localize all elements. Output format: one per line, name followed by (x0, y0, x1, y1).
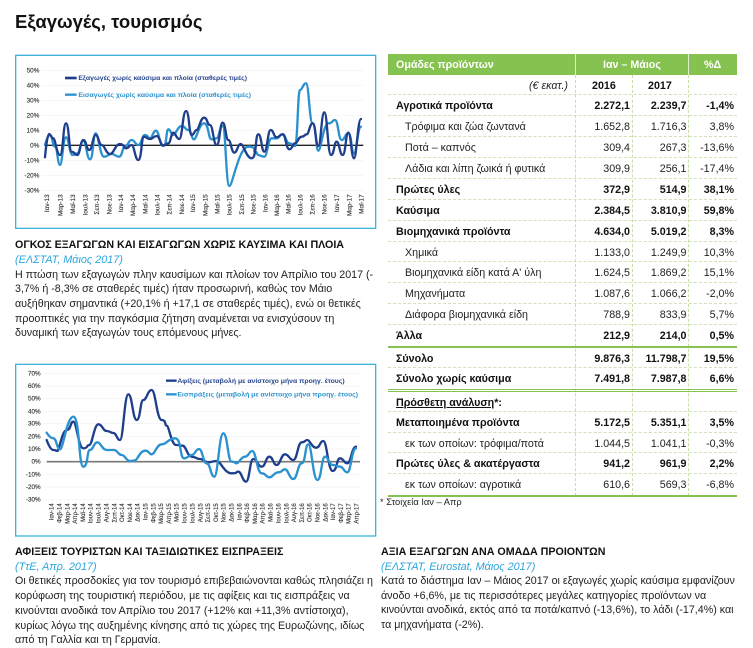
y axis labels: 30% (27, 97, 40, 104)
x axis labels: Μαρ-14 (65, 503, 71, 524)
row: 309,4 (603, 142, 630, 154)
row: 961,9 (660, 458, 686, 470)
row: total excluding fuels: 6,6% (710, 373, 734, 385)
row: 788,9 (603, 309, 630, 321)
x axis labels: Απρ-16 (261, 503, 267, 524)
row: 1.087,6 (594, 288, 630, 300)
x axis labels: Ιουν-15 (183, 503, 189, 523)
row: 38,1% (704, 184, 734, 196)
x axis labels: Μαϊ-15 (175, 503, 181, 522)
legend (166, 377, 358, 399)
row (388, 304, 737, 325)
row: 833,9 (660, 309, 686, 321)
row: 2.239,7 (651, 100, 686, 112)
line: receipts (47, 417, 356, 480)
row: εκ των οποίων: τρόφιμα/ποτά (405, 438, 544, 450)
row: 2,2% (710, 458, 734, 470)
row: 4.634,0 (594, 226, 630, 238)
row: Διάφορα βιομηχανικά είδη (405, 309, 528, 321)
section: tourism text (15, 546, 373, 646)
title: Εξαγωγές, τουρισμός (15, 11, 202, 32)
row: -17,4% (700, 163, 734, 175)
x axis labels: Δεκ-14 (136, 503, 142, 522)
section: exports and imports text (15, 239, 373, 339)
section: export value text (381, 546, 735, 631)
row: total excluding fuels: Σύνολο χωρίς καύσιμα (396, 373, 511, 385)
row (388, 262, 737, 283)
row: -2,0% (706, 288, 734, 300)
row: Λάδια και λίπη ζωικά ή φυτικά (405, 163, 545, 175)
row: total: 19,5% (704, 353, 734, 365)
row: 941,2 (603, 458, 630, 470)
line: exports (45, 111, 361, 160)
heading: ΑΞΙΑ ΕΞΑΓΩΓΩΝ ΑΝΑ ΟΜΑΔΑ ΠΡΟΙΟΝΤΩΝ (381, 546, 605, 558)
x axis labels: Μαρ-17 (346, 194, 353, 216)
x axis labels: Μαρ-15 (159, 503, 165, 524)
y axis labels: 20% (27, 112, 40, 119)
body text: κινούνται ανοδικά τον Απρίλιο του 2017 (+12% και +11,3% αντίστοιχα), (15, 605, 349, 617)
table: exports by product group (388, 54, 737, 497)
x axis labels: Μαρ-15 (202, 194, 209, 216)
row: 1.249,9 (651, 247, 686, 259)
x axis labels: Φεβ-17 (339, 503, 345, 523)
x axis labels: Μαϊ-15 (214, 194, 221, 214)
row (388, 221, 737, 242)
x axis labels: Ιαν-17 (331, 503, 337, 520)
x axis labels: Φεβ-15 (151, 503, 157, 523)
row: -13,6% (700, 142, 734, 154)
x axis labels: Αυγ-15 (198, 503, 204, 522)
row: 5.172,5 (594, 417, 630, 429)
x axis labels: Μαρ-17 (347, 503, 353, 524)
row (405, 479, 734, 491)
row: 5,7% (710, 309, 734, 321)
row: 3,5% (710, 417, 734, 429)
row: 15,1% (704, 267, 734, 279)
line: arrivals (47, 390, 356, 482)
unit row: (€ εκατ.) (529, 80, 568, 92)
x axis labels: Σεπ-14 (112, 503, 118, 523)
row (388, 179, 737, 200)
y axis labels: -20% (25, 172, 40, 179)
row: 10,3% (704, 247, 734, 259)
y axis labels: 0% (32, 459, 41, 466)
row: Χημικά (405, 247, 438, 259)
row (388, 116, 737, 137)
y axis labels: 50% (28, 396, 41, 403)
row: 1.044,5 (594, 438, 630, 450)
y axis labels: 20% (28, 433, 41, 440)
x axis labels: Ιαν-15 (144, 503, 150, 520)
legend: Εξαγωγές χωρίς καύσιμα και πλοία (σταθερές τιμές) (78, 74, 247, 82)
row: 372,9 (603, 184, 630, 196)
body text: 3,7% ή -8,3% σε σταθερές τιμές) ήταν προσωρινή, καθώς τον Μάιο (15, 283, 332, 295)
x axis labels: Ιουν-14 (89, 503, 95, 523)
row: Πρώτες ύλες & ακατέργαστα (396, 458, 540, 470)
row: 1.869,2 (651, 267, 686, 279)
row: 1.041,1 (651, 438, 686, 450)
x axis labels: Αυγ-16 (292, 503, 298, 522)
x axis labels: Ιουλ-15 (226, 194, 233, 215)
legend (65, 74, 251, 99)
row: Βιομηχανικά είδη κατά Α' ύλη (405, 267, 541, 279)
line: imports (45, 83, 361, 186)
x axis labels: Ιουλ-14 (97, 503, 103, 523)
y axis labels: 10% (27, 127, 40, 134)
x axis labels: Νοε-15 (222, 503, 228, 522)
x axis labels: Ιαν-13 (44, 194, 51, 212)
body text (15, 269, 373, 339)
body text: Κατά το διάστημα Ιαν – Μάιος 2017 οι εξαγωγές χωρίς καύσιμα εμφανίζουν (381, 575, 735, 587)
x axis labels: Μαϊ-14 (81, 503, 87, 522)
x axis labels: Νοε-16 (322, 194, 329, 214)
body text (381, 575, 735, 631)
row: 0,5% (710, 330, 734, 342)
row: -0,3% (706, 438, 734, 450)
x axis labels: Ιαν-16 (237, 503, 243, 520)
x axis labels: Οκτ-15 (214, 503, 220, 522)
legend: Αφίξεις (μεταβολή με ανίστοιχο μήνα προηγ. έτους) (177, 377, 345, 385)
row: 1.066,2 (651, 288, 686, 300)
body text: κυρίως λόγω της αυξημένης κίνησης από τις χώρες της Ευρωζώνης, ιδίως (15, 620, 364, 632)
x axis labels: Ιουλ-15 (190, 503, 196, 523)
x axis labels: Μαϊ-13 (70, 194, 77, 214)
row (396, 330, 734, 342)
unit row: 2017 (648, 80, 672, 92)
row: 267,3 (660, 142, 686, 154)
body text: άνοδο +6,6%, με τις περισσότερες μεγάλες κατηγορίες προϊόντων να (381, 590, 706, 602)
row (388, 453, 737, 474)
legend: Εισπράξεις (μεταβολή με ανίστοιχο μήνα προηγ. έτους) (177, 391, 358, 399)
table header: %Δ (704, 59, 721, 71)
x axis labels: Δεκ-15 (230, 503, 236, 522)
y axis labels: 0% (30, 142, 40, 149)
x axis labels (44, 194, 365, 216)
row: 3.810,9 (651, 205, 686, 217)
row: 610,6 (603, 479, 630, 491)
row: Μηχανήματα (405, 288, 465, 300)
legend: Εισαγωγές χωρίς καύσιμα και πλοία (σταθερές τιμές) (78, 91, 251, 99)
x axis labels: Απρ-17 (355, 503, 361, 524)
body text: κινούνται ανοδικά, εκτός από τα ποτά/καπνό (-13,6%), το λάδι (-17,4%) και (381, 604, 734, 616)
row: 214,0 (660, 330, 686, 342)
body text: Η πτώση των εξαγωγών πλην καυσίμων και πλοίων τον Απρίλιο του 2017 (- (15, 269, 373, 281)
y axis labels (25, 67, 40, 194)
row: εκ των οποίων: αγροτικά (405, 479, 521, 491)
x axis labels: Οκτ-14 (120, 503, 126, 522)
row: 309,9 (603, 163, 630, 175)
x axis labels: Νοε-15 (251, 194, 258, 214)
x axis labels: Αυγ-14 (104, 503, 110, 522)
row: additional analysis (388, 392, 737, 412)
x axis labels: Ιουλ-14 (155, 194, 162, 215)
row: Καύσιμα (396, 205, 440, 217)
row: total excluding fuels (396, 373, 734, 385)
row: Βιομηχανικά προϊόντα (396, 226, 510, 238)
row (388, 95, 737, 116)
x axis labels: Σεπ-14 (166, 194, 173, 215)
body text: τα μηχανήματα (-2%). (381, 619, 484, 631)
x axis labels: Απρ-15 (167, 503, 173, 524)
row (388, 158, 737, 179)
x axis labels: Ιαν-14 (50, 503, 56, 520)
row: 59,8% (704, 205, 734, 217)
source: (ΕΛΣΤΑΤ, Μάιος 2017) (15, 254, 123, 266)
x axis labels: Σεπ-16 (300, 503, 306, 523)
x axis labels: Σεπ-15 (206, 503, 212, 523)
row: 5.351,1 (651, 417, 686, 429)
source: (ΕΛΣΤΑΤ, Eurostat, Μάιος 2017) (381, 561, 535, 573)
body text: από τη Γαλλία και τη Γερμανία. (15, 634, 161, 646)
body text: κορύφωση της τουριστική περιόδου, με τις αφίξεις και τις εισπράξεις να (15, 590, 350, 602)
row: total: 9.876,3 (594, 353, 630, 365)
row: Τρόφιμα και ζώα ζωντανά (405, 121, 526, 133)
row (388, 242, 737, 262)
x axis labels: Σεπ-16 (310, 194, 317, 215)
unit row (388, 75, 737, 95)
x axis labels: Νοε-14 (128, 503, 134, 522)
body text (15, 575, 373, 646)
row: 5.019,2 (651, 226, 686, 238)
table header (388, 54, 737, 75)
row (388, 200, 737, 221)
row: total: 11.798,7 (645, 353, 686, 365)
y axis labels: -20% (26, 484, 41, 491)
row: 1.652,8 (594, 121, 630, 133)
x axis labels: Νοε-14 (179, 194, 186, 214)
row: 2.384,5 (594, 205, 630, 217)
x axis labels: Σεπ-15 (239, 194, 246, 215)
row: 1.716,3 (651, 121, 686, 133)
y axis labels: 40% (27, 82, 40, 89)
x axis labels: Απρ-14 (73, 503, 79, 524)
y axis labels: -30% (26, 497, 41, 504)
x axis labels: Μαϊ-14 (142, 194, 149, 214)
row (388, 412, 737, 433)
table footnote: * Στοιχεία Ιαν – Απρ (380, 497, 462, 507)
x axis labels: Φεβ-16 (245, 503, 251, 523)
row: Άλλα (396, 330, 422, 342)
x axis labels (50, 503, 361, 524)
chart: exports and imports volume (15, 54, 376, 229)
x axis labels: Νοε-13 (106, 194, 113, 214)
x axis labels: Φεβ-14 (57, 503, 63, 523)
row: total (388, 348, 737, 368)
x axis labels: Ιουλ-13 (82, 194, 89, 215)
x axis labels: Ιαν-14 (118, 194, 125, 212)
chart: tourist arrivals and receipts (15, 364, 376, 537)
row: 569,3 (660, 479, 686, 491)
y axis labels: 50% (27, 67, 40, 74)
x axis labels: Ιαν-16 (262, 194, 269, 212)
row: 1.133,0 (594, 247, 630, 259)
heading: ΟΓΚΟΣ ΕΞΑΓΩΓΩΝ ΚΑΙ ΕΙΣΑΓΩΓΩΝ ΧΩΡΙΣ ΚΑΥΣΙΜΑ ΚΑΙ ΠΛΟΙΑ (15, 239, 344, 251)
x axis labels: Οκτ-16 (308, 503, 314, 522)
row: Πρώτες ύλες (396, 184, 460, 196)
x axis labels: Νοε-16 (315, 503, 321, 522)
x axis labels: Δεκ-16 (323, 503, 329, 522)
row: Αγροτικά προϊόντα (396, 100, 493, 112)
y axis labels: 70% (28, 370, 41, 377)
x axis labels: Μαρ-16 (274, 194, 281, 216)
row: additional analysis: Πρόσθετη ανάλυση*: (396, 397, 502, 409)
body text: Οι θετικές προσδοκίες για τον τουρισμό επιβεβαιώνονται καθώς πλησιάζει η (15, 575, 373, 587)
row: 3,8% (710, 121, 734, 133)
row: total: Σύνολο (396, 353, 433, 365)
row: 256,1 (660, 163, 686, 175)
row: -1,4% (706, 100, 734, 112)
unit row: 2016 (592, 80, 616, 92)
row: 212,9 (603, 330, 630, 342)
row (388, 137, 737, 158)
x axis labels: Ιουλ-16 (297, 194, 304, 215)
x axis labels: Ιαν-17 (334, 194, 341, 212)
source: (ΤτΕ, Απρ. 2017) (15, 561, 97, 573)
table header: Ομάδες προϊόντων (396, 59, 494, 71)
heading: ΑΦΙΞΕΙΣ ΤΟΥΡΙΣΤΩΝ ΚΑΙ ΤΑΞΙΔΙΩΤΙΚΕΣ ΕΙΣΠΡΑΞΕΙΣ (15, 546, 283, 558)
row (388, 433, 737, 453)
row (388, 283, 737, 304)
x axis labels: Ιαν-15 (190, 194, 197, 212)
body text: δυναμική των εξαγωγών τους επόμενους μήνες. (15, 327, 242, 339)
x axis labels: Μαϊ-16 (286, 194, 293, 214)
body text: προοπτικές για την παγκόσμια ζήτηση αναμένεται να ενισχύσουν τη (15, 313, 334, 325)
y axis labels: -10% (25, 157, 40, 164)
y axis labels: 60% (28, 383, 41, 390)
y axis labels: -30% (25, 187, 40, 194)
x axis labels: Μαϊ-16 (269, 503, 275, 522)
y axis labels: 40% (28, 408, 41, 415)
x axis labels: Μαρ-16 (253, 503, 259, 524)
x axis labels: Σεπ-13 (94, 194, 101, 215)
x axis labels: Μαρ-14 (130, 194, 137, 216)
row: total excluding fuels: 7.987,8 (651, 373, 686, 385)
y axis labels: -10% (26, 471, 41, 478)
row: 2.272,1 (594, 100, 630, 112)
row: Ποτά – καπνός (405, 142, 476, 154)
row: -6,8% (706, 479, 734, 491)
y axis labels: 10% (28, 446, 41, 453)
x axis labels: Μαϊ-17 (358, 194, 365, 214)
x axis labels: Ιουλ-16 (284, 503, 290, 523)
x axis labels: Ιουν-16 (276, 503, 282, 523)
table header: Ιαν – Μάιος (603, 59, 661, 71)
row: 1.624,5 (594, 267, 630, 279)
y axis labels (26, 370, 41, 504)
row: 8,3% (710, 226, 734, 238)
row: 514,9 (660, 184, 686, 196)
y axis labels: 30% (28, 421, 41, 428)
x axis labels: Μαρ-13 (57, 194, 64, 216)
body text: αυξήθηκαν σημαντικά (+20,1% ή +17,1 σε σταθερές τιμές), ενώ οι θετικές (15, 298, 361, 310)
row: total excluding fuels: 7.491,8 (594, 373, 630, 385)
row: Μεταποιημένα προϊόντα (396, 417, 520, 429)
